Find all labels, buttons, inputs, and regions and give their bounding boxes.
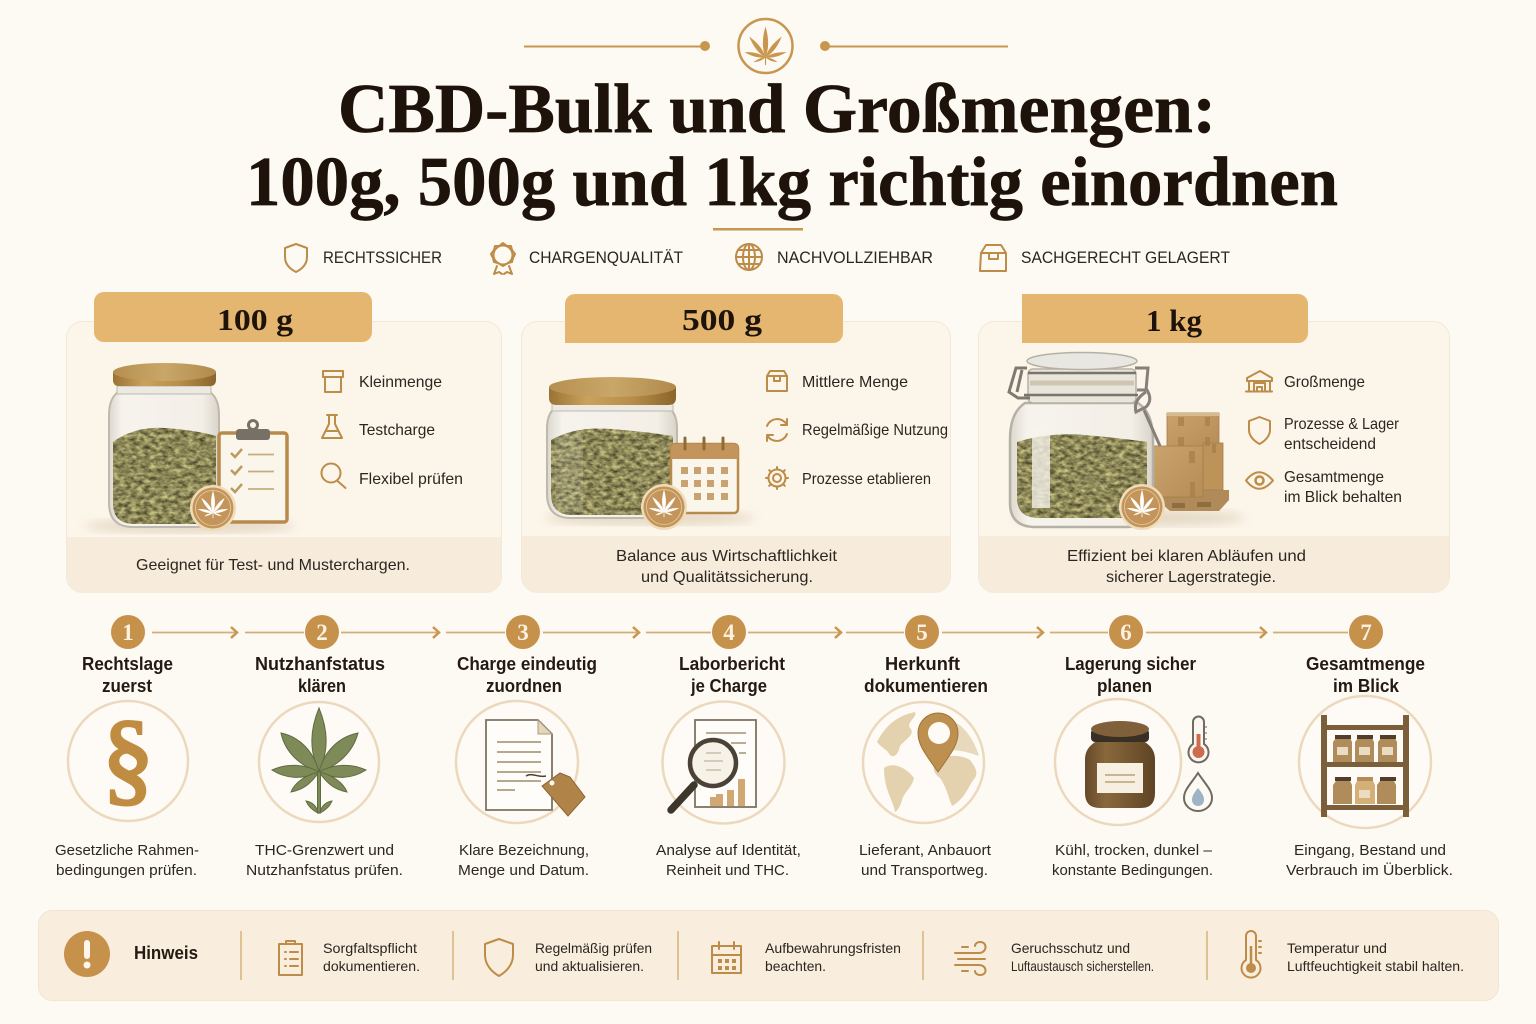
note: Aufbewahrungsfristen: Aufbewahrungsfristen [765, 940, 901, 956]
caption: 500 g: und Qualitätssicherung. [641, 569, 813, 586]
caption: 500 g: Balance aus Wirtschaftlichkeit [616, 548, 838, 565]
heading: Herkunft [885, 654, 960, 674]
note: Regelmäßig prüfen [485, 939, 652, 976]
tab: 100 g: 100 g [217, 302, 294, 337]
heading: je Charge [690, 676, 767, 696]
icon: paragraph [68, 700, 188, 821]
description: Kühl, trocken, dunkel – [1055, 842, 1213, 859]
icon: box [323, 371, 343, 392]
description: bedingungen prüfen. [56, 862, 197, 879]
step 5 [859, 615, 992, 879]
step 4 [656, 615, 801, 879]
icon: gear [766, 467, 788, 489]
list: 500 g properties: Mittlere Menge [802, 374, 908, 391]
icon: water drop [1184, 773, 1212, 811]
icon: amber jar [1055, 699, 1181, 825]
list: 100 g properties: Kleinmenge [359, 374, 442, 391]
description: Nutzhanfstatus prüfen. [246, 862, 403, 879]
description: Menge und Datum. [458, 862, 589, 879]
heading: zuordnen [486, 676, 562, 696]
list: 500 g properties [766, 371, 948, 489]
header ornament [524, 19, 1008, 73]
icon: open box [767, 371, 787, 391]
icon: paragraph: § [102, 700, 154, 815]
list: 1 kg properties [1246, 371, 1402, 506]
text: Prozesse & Lager: Prozesse & Lager [1284, 416, 1400, 433]
icon: flask [322, 415, 342, 438]
icon: eye [1246, 472, 1273, 489]
feature: nachvollziehbar [736, 244, 933, 270]
title rule [713, 228, 803, 230]
description: Verbrauch im Überblick. [1286, 861, 1453, 879]
step 4: 4 [723, 620, 735, 645]
heading [679, 654, 785, 696]
text: Gesamtmenge: im Blick behalten [1284, 489, 1402, 506]
icon: storage shelf [1299, 696, 1431, 828]
note: Sorgfaltspflicht: dokumentieren. [323, 958, 420, 974]
caption: 1 kg: sicherer Lagerstrategie. [1106, 569, 1276, 586]
title: 100g, 500g und 1kg richtig einordnen [246, 144, 1338, 221]
icon: lab report with magnifier [662, 702, 784, 824]
description [246, 842, 403, 879]
caption: 500 g [616, 548, 838, 586]
heading: Gesamtmenge [1306, 654, 1425, 674]
note: Geruchsschutz: Luftaustausch sicherstellen. [1011, 958, 1154, 974]
icon: warehouse [1246, 371, 1272, 392]
panel: 1 kg [978, 294, 1450, 593]
list: 1 kg properties: Großmenge [1284, 374, 1365, 391]
heading: dokumentieren [864, 676, 988, 696]
step 3: 3 [517, 620, 529, 645]
panel: 500 g [522, 294, 950, 593]
caption: 1 kg: Effizient bei klaren Abläufen und [1067, 548, 1306, 565]
heading: Lagerung sicher [1065, 654, 1196, 674]
description [1052, 842, 1213, 879]
title [246, 71, 1338, 221]
note: Regelmäßig prüfen: Regelmäßig prüfen [535, 940, 652, 956]
list: 100 g properties [322, 371, 463, 488]
step 7: 7 [1360, 620, 1372, 645]
note: Regelmäßig prüfen: und aktualisieren. [535, 958, 644, 974]
caption: 1 kg [1067, 548, 1306, 586]
step 5: 5 [916, 620, 928, 645]
feature: nachvollziehbar: NACHVOLLZIEHBAR [777, 249, 933, 267]
tab: 500 g: 500 g [682, 302, 763, 337]
heading: Nutzhanfstatus [255, 654, 385, 674]
heading: planen [1097, 676, 1152, 696]
heading: Laborbericht [679, 654, 785, 674]
step 2: 2 [316, 620, 328, 645]
note bar [38, 910, 1498, 1000]
description: und Transportweg. [861, 862, 988, 879]
note: Aufbewahrungsfristen [712, 940, 901, 974]
feature: chargenqualität: CHARGENQUALITÄT [529, 249, 683, 267]
list: 500 g properties: Prozesse etablieren [802, 471, 931, 488]
description: Gesetzliche Rahmen- [55, 842, 199, 859]
description [859, 842, 992, 879]
step 1 [55, 615, 199, 879]
tab: 1 kg [1022, 294, 1308, 343]
tab: 100 g [94, 292, 372, 342]
step 3 [456, 615, 597, 879]
note: Temperatur [1241, 931, 1464, 978]
heading: klären [298, 676, 346, 696]
icon: thermometer [1188, 717, 1208, 762]
heading [255, 654, 385, 696]
tab: 500 g [565, 294, 843, 343]
description [656, 842, 801, 879]
illustration: jar with calendar [545, 377, 755, 530]
text: Gesamtmenge: Gesamtmenge [1284, 469, 1384, 486]
feature: sachgerecht gelagert: SACHGERECHT GELAGERT [1021, 249, 1230, 267]
description: Analyse auf Identität, [656, 842, 801, 859]
list: 500 g properties: Regelmäßige Nutzung [802, 422, 948, 439]
feature: sachgerecht gelagert [980, 245, 1230, 271]
description: Klare Bezeichnung, [459, 842, 589, 859]
description: Eingang, Bestand und [1294, 842, 1446, 859]
description: Lieferant, Anbauort [859, 842, 992, 859]
heading [457, 654, 597, 696]
note: Sorgfaltspflicht [279, 940, 420, 975]
caption: 100 g: Geeignet für Test- und Musterchargen. [136, 557, 410, 574]
note: Temperatur: Luftfeuchtigkeit stabil halten. [1287, 958, 1464, 974]
heading [82, 654, 173, 696]
label: Hinweis: Hinweis [134, 943, 198, 963]
description [55, 842, 199, 879]
heading: Charge eindeutig [457, 654, 597, 674]
description: Reinheit und THC. [666, 862, 789, 879]
step 6: 6 [1120, 620, 1132, 645]
feature: rechtssicher [285, 244, 442, 272]
panel: 100 g [66, 292, 502, 593]
title: CBD-Bulk und Großmengen: [338, 71, 1216, 148]
list: 100 g properties: Testcharge [359, 422, 435, 439]
text: Gesamtmenge [1284, 469, 1402, 506]
description: konstante Bedingungen. [1052, 862, 1213, 879]
step 2 [246, 615, 403, 879]
note: Aufbewahrungsfristen: beachten. [765, 958, 826, 974]
note: Temperatur: Temperatur und [1287, 940, 1387, 956]
icon: hemp leaf [259, 702, 379, 822]
process connectors [152, 627, 1348, 638]
note: Geruchsschutz: Geruchsschutz und [1011, 940, 1130, 956]
tab: 1 kg: 1 kg [1146, 303, 1202, 338]
step 1: 1 [122, 620, 134, 645]
note: Geruchsschutz [955, 940, 1154, 975]
description: THC-Grenzwert und [255, 842, 394, 859]
text: Prozesse & Lager: entscheidend [1284, 436, 1376, 453]
icon: document with tag [456, 701, 585, 823]
icon: shield [1249, 417, 1270, 444]
feature: chargenqualität [491, 243, 683, 274]
icon: magnifier [322, 464, 346, 488]
illustration: clamp jar with boxes [1009, 352, 1245, 530]
description [1286, 842, 1453, 879]
list: 100 g properties: Flexibel prüfen [359, 471, 463, 488]
illustration: jar with clipboard [85, 363, 295, 533]
step 7 [1286, 615, 1453, 879]
icon: refresh [767, 419, 787, 441]
heading: im Blick [1333, 676, 1400, 696]
step 6 [1052, 615, 1213, 879]
heading [1306, 654, 1425, 696]
heading [864, 654, 988, 696]
feature: rechtssicher: RECHTSSICHER [323, 249, 442, 267]
heading: Rechtslage [82, 654, 173, 674]
feature row [285, 243, 1230, 274]
boxes on pallet [1153, 413, 1229, 511]
heading: zuerst [102, 676, 152, 696]
icon: globe with pin [863, 702, 984, 823]
note: Sorgfaltspflicht: Sorgfaltspflicht [323, 940, 417, 956]
text: Prozesse & Lager [1284, 416, 1400, 453]
heading [1065, 654, 1196, 696]
icon: alert [64, 931, 110, 977]
description [458, 842, 589, 879]
